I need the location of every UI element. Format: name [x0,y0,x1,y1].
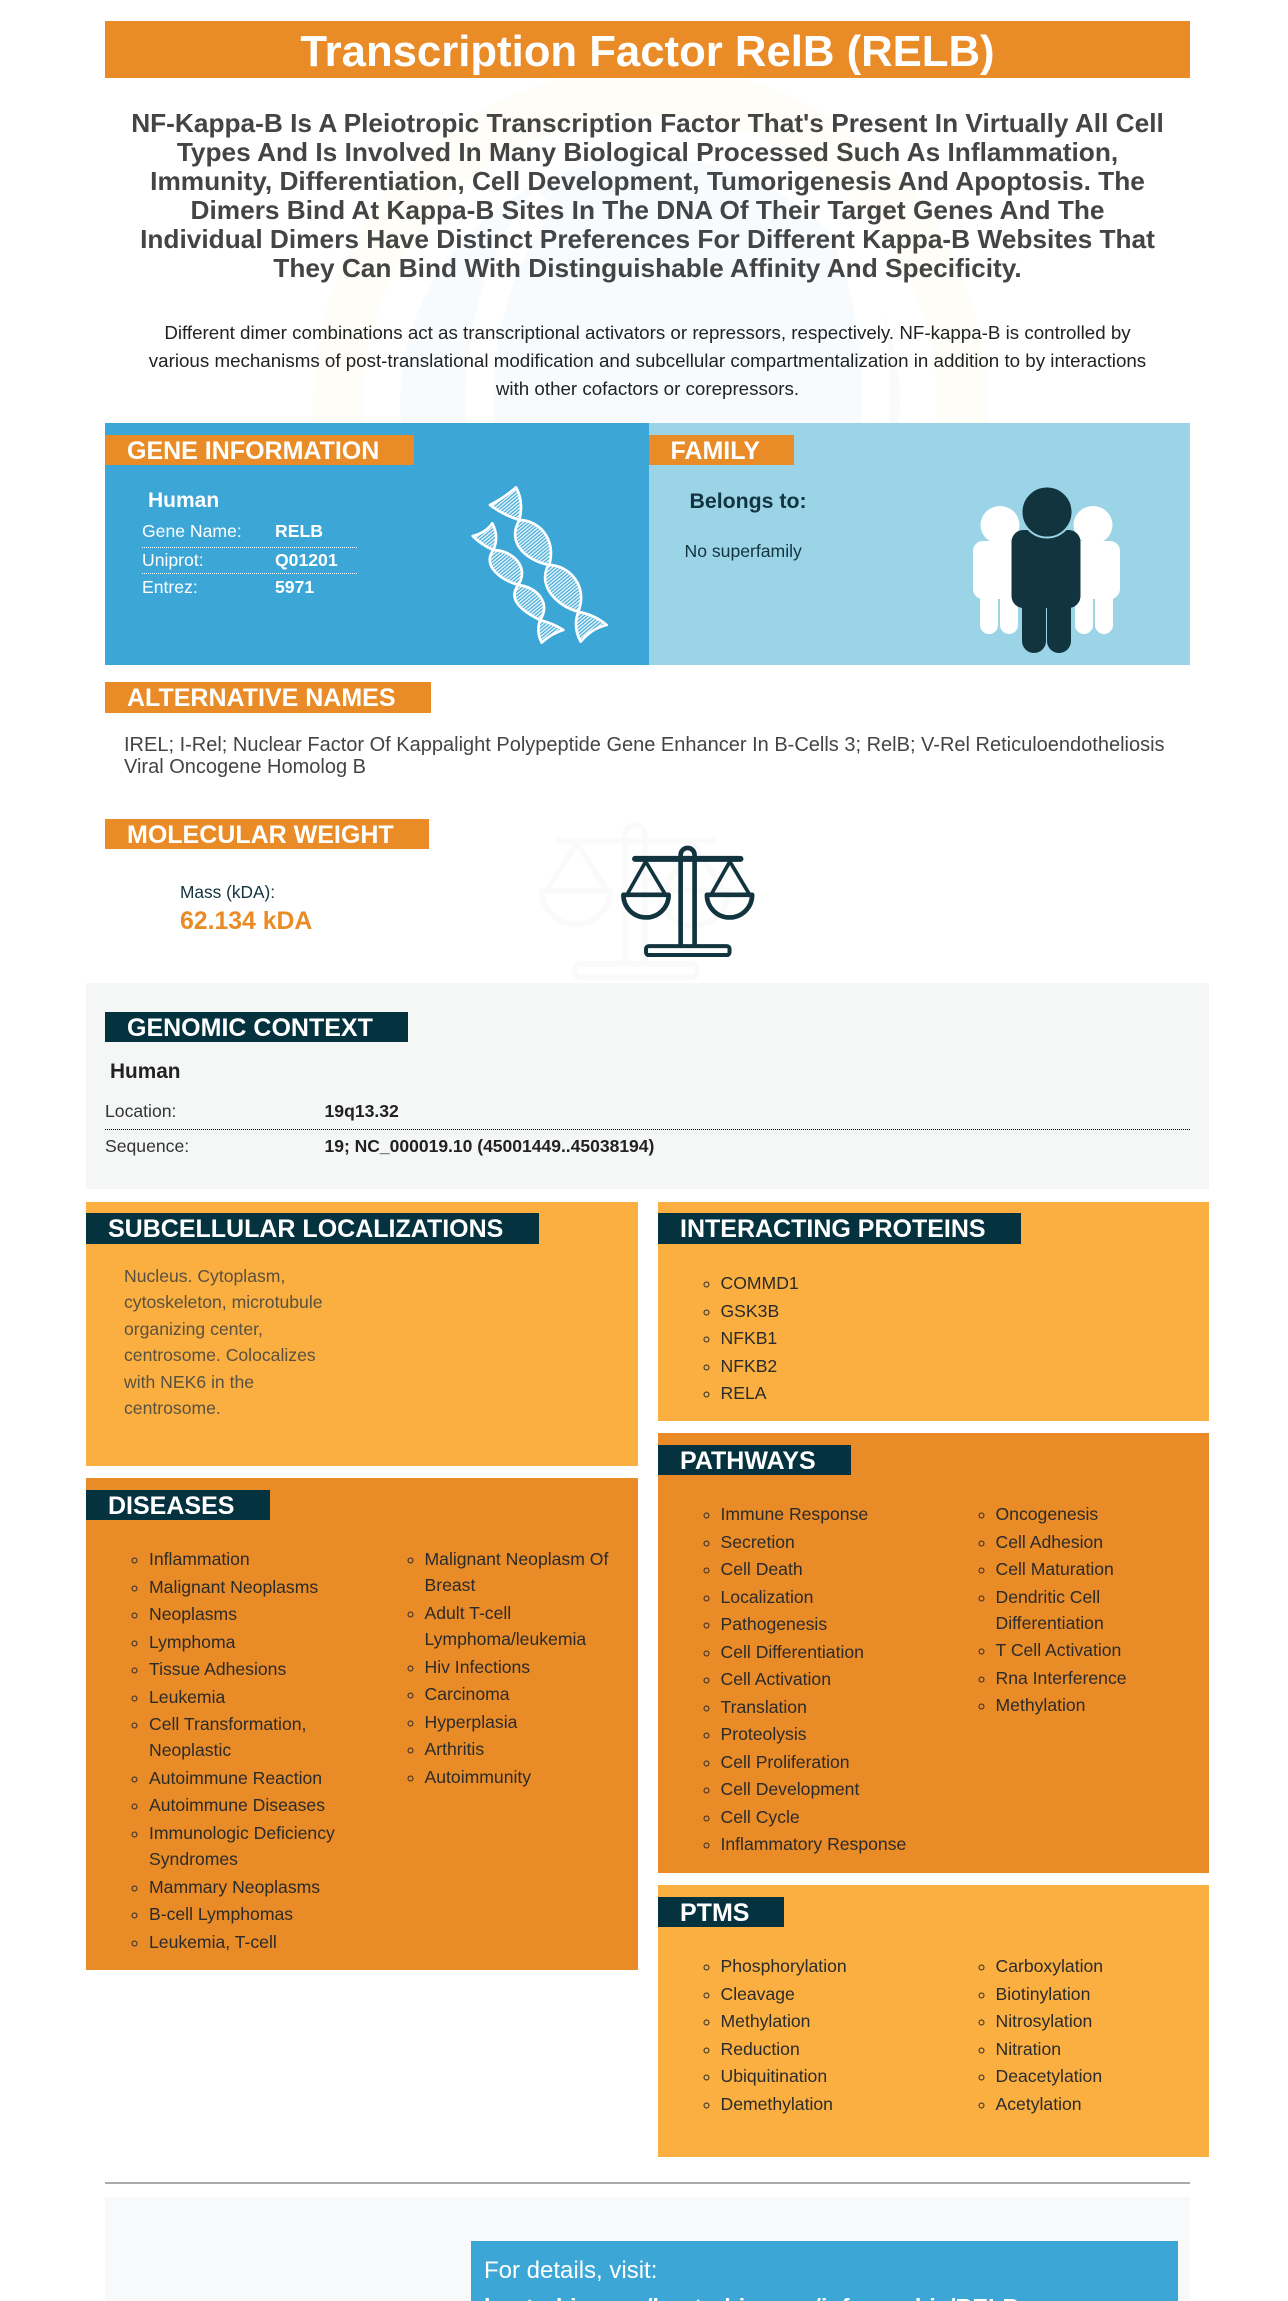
ptm list column 1: Phosphorylation [720,1956,847,1976]
disease list column 1: Immunologic Deficiency [149,1823,335,1843]
panel: footer [105,2197,1190,2301]
heading: pathways: PATHWAYS [680,1447,816,1475]
disease list column 1: Inflammation [149,1549,250,1569]
disease list column 2: Lymphoma/leukemia [424,1629,586,1649]
gene name row: Gene Name: [142,521,242,541]
localization text: centrosome. Colocalizes [124,1345,316,1365]
uniprot row: Q01201 [275,550,338,570]
pathway list column 1: Inflammatory Response [720,1834,906,1854]
panel: interacting proteins [658,1202,1209,1421]
pathway list column 2 [978,1504,1127,1715]
pathway list column 2: T Cell Activation [996,1640,1121,1660]
intro heading: NF-Kappa-B Is A Pleiotropic Transcription Factor That's Present In Virtually All Cell [131,108,1164,138]
localization text: Nucleus. Cytoplasm, [124,1266,285,1286]
alternative names text [124,734,1165,778]
pathway list column 1 [704,1504,906,1854]
pathway list column 2: Differentiation [996,1613,1104,1633]
details label: For details, visit: [484,2257,657,2284]
disease list column 2 [408,1549,608,1787]
disease list column 2: Arthritis [424,1739,484,1759]
disease list column 1: B-cell Lymphomas [149,1904,293,1924]
localization text: with NEK6 in the [124,1372,254,1392]
heading: diseases: DISEASES [108,1492,234,1520]
heading: interacting proteins: INTERACTING PROTEINS [680,1215,986,1243]
location row: Location: [105,1101,176,1121]
mass value: 62.134 kDA [180,908,312,935]
intro paragraph: with other cofactors or corepressors. [496,378,799,399]
sequence row: Sequence: [105,1136,189,1156]
protein list: GSK3B [720,1300,779,1320]
ptm list column 1: Reduction [720,2038,800,2058]
pathway list column 2: Cell Adhesion [996,1532,1103,1552]
disease list column 1: Syndromes [149,1849,238,1869]
pathway list column 1: Cell Activation [720,1669,831,1689]
heading: subcellular localizations: SUBCELLULAR LOCALIZATIONS [108,1215,503,1243]
entrez row [142,577,314,597]
heading: alternative names: ALTERNATIVE NAMES [127,684,396,712]
disease list column 1: Autoimmune Diseases [149,1795,325,1815]
panel: ptms [658,1885,1209,2157]
panel: diseases [86,1478,638,1970]
disease list column 2: Hyperplasia [424,1712,517,1732]
intro heading: Types And Is Involved In Many Biological Processed Such As Inflammation, [177,137,1118,167]
heading: family: FAMILY [670,437,760,465]
disease list column 1 [132,1549,335,1952]
pathway list column 1: Immune Response [720,1504,868,1524]
panel: subcellular localizations [86,1202,638,1466]
background watermark logo [280,78,1020,423]
localization text: organizing center, [124,1319,263,1339]
gene name row [142,518,357,548]
heading: pathways [658,1445,851,1475]
superfamily value: No superfamily [684,541,802,561]
intro heading: Dimers Bind At Kappa-B Sites In The DNA Of Their Target Genes And The [190,195,1104,225]
pathway list column 2: Rna Interference [996,1668,1127,1688]
disease list column 1: Lymphoma [149,1632,235,1652]
disease list column 1: Leukemia, T-cell [149,1932,277,1952]
entrez row: 5971 [275,577,314,597]
disease list column 2: Malignant Neoplasm Of [424,1549,608,1569]
icon: balance scale [621,846,754,957]
uniprot row: Uniprot: [142,550,204,570]
intro paragraph: Different dimer combinations act as transcriptional activators or repressors, respectively. NF-kappa-B is controlled by [164,322,1131,343]
ptm list column 2: Nitration [996,2038,1061,2058]
pathway list column 2: Oncogenesis [996,1504,1098,1524]
protein list: COMMD1 [720,1273,799,1293]
ptm list column 2: Nitrosylation [996,2011,1092,2031]
disease list column 1: Neoplasms [149,1604,237,1624]
disease list column 1: Autoimmune Reaction [149,1768,322,1788]
ptm list column 2: Acetylation [996,2094,1082,2114]
ptm list column 2: Deacetylation [996,2066,1102,2086]
ptm list column 1 [704,1956,847,2114]
localization text [124,1266,323,1418]
location row: 19q13.32 [324,1101,399,1121]
alternative names text: IREL; I-Rel; Nuclear Factor Of Kappalight Polypeptide Gene Enhancer In B-Cells 3; RelB; V-Rel Reticuloendotheliosis [124,734,1165,756]
protein list: NFKB1 [720,1328,777,1348]
pathway list column 2: Dendritic Cell [996,1586,1100,1606]
disease list column 2: Adult T-cell [424,1603,511,1623]
species label: Human [110,1060,180,1083]
heading: genomic context: GENOMIC CONTEXT [127,1014,373,1042]
disease list column 1: Malignant Neoplasms [149,1576,318,1596]
pathway list column 1: Cell Cycle [720,1806,800,1826]
ptm list column 2: Biotinylation [996,1984,1090,2004]
heading: family [648,435,794,465]
panel: pathways [658,1433,1209,1873]
ptm list column 1: Cleavage [720,1984,795,2004]
heading: gene information: GENE INFORMATION [127,437,379,465]
disease list column 1: Mammary Neoplasms [149,1877,320,1897]
pathway list column 1: Translation [720,1696,807,1716]
intro heading: Individual Dimers Have Distinct Preferences For Different Kappa-B Websites That [140,224,1155,254]
disease list column 1: Tissue Adhesions [149,1659,286,1679]
intro paragraph: various mechanisms of post-translational modification and subcellular compartmentalization in addition to by interactions [149,350,1146,371]
panel: genomic context [86,983,1209,1189]
pathway list column 1: Cell Proliferation [720,1752,850,1772]
location row [105,1098,1190,1130]
icon: family people [973,488,1120,653]
ptm list column 2: Carboxylation [996,1956,1103,1976]
pathway list column 1: Proteolysis [720,1724,807,1744]
disease list column 1: Neoplastic [149,1740,231,1760]
pathway list column 1: Cell Differentiation [720,1642,864,1662]
belongs to label: Belongs to: [690,489,807,513]
ptm list column 2 [978,1956,1103,2114]
alternative names text: Viral Oncogene Homolog B [124,756,366,778]
pathway list column 2: Methylation [996,1695,1085,1715]
pathway list column 1: Localization [720,1586,813,1606]
disease list column 2: Breast [424,1575,475,1595]
heading: ptms: PTMS [680,1899,749,1927]
gene name row: RELB [275,521,323,541]
intro heading: Immunity, Differentiation, Cell Development, Tumorigenesis And Apoptosis. The [150,166,1145,196]
pathway list column 1: Pathogenesis [720,1614,827,1634]
intro heading: They Can Bind With Distinguishable Affinity And Specificity. [273,253,1022,283]
sequence row: 19; NC_000019.10 (45001449..45038194) [324,1136,654,1156]
uniprot row [142,547,357,574]
protein list: RELA [720,1383,766,1403]
pathway list column 1: Cell Death [720,1559,803,1579]
localization text: cytoskeleton, microtubule [124,1292,323,1312]
pathway list column 1: Secretion [720,1532,795,1552]
intro paragraph [148,322,1146,399]
icon: dna [471,486,608,644]
ptm list column 1: Ubiquitination [720,2066,827,2086]
disease list column 1: Cell Transformation, [149,1714,306,1734]
pathway list column 1: Cell Development [720,1779,859,1799]
localization text: centrosome. [124,1398,221,1418]
disease list column 2: Autoimmunity [424,1767,531,1787]
heading: ptms [658,1897,784,1927]
disease list column 2: Carcinoma [424,1684,510,1704]
intro heading [131,108,1164,283]
panel: family [648,423,1190,665]
details callout [471,2241,1178,2301]
protein list: NFKB2 [720,1356,777,1376]
entrez row: Entrez: [142,577,198,597]
heading: molecular weight: MOLECULAR WEIGHT [127,821,394,849]
panel: gene information [105,423,648,665]
disease list column 1: Leukemia [149,1686,225,1706]
pathway list column 2: Cell Maturation [996,1559,1114,1579]
title [105,21,1190,78]
species label: Human [148,489,219,512]
heading: diseases [86,1490,270,1520]
sequence row [105,1136,654,1156]
mass label: Mass (kDA): [180,882,275,902]
ptm list column 1: Methylation [720,2011,810,2031]
disease list column 2: Hiv Infections [424,1657,530,1677]
title: Transcription Factor RelB (RELB) [300,27,995,76]
protein list [704,1273,799,1403]
ptm list column 1: Demethylation [720,2094,833,2114]
